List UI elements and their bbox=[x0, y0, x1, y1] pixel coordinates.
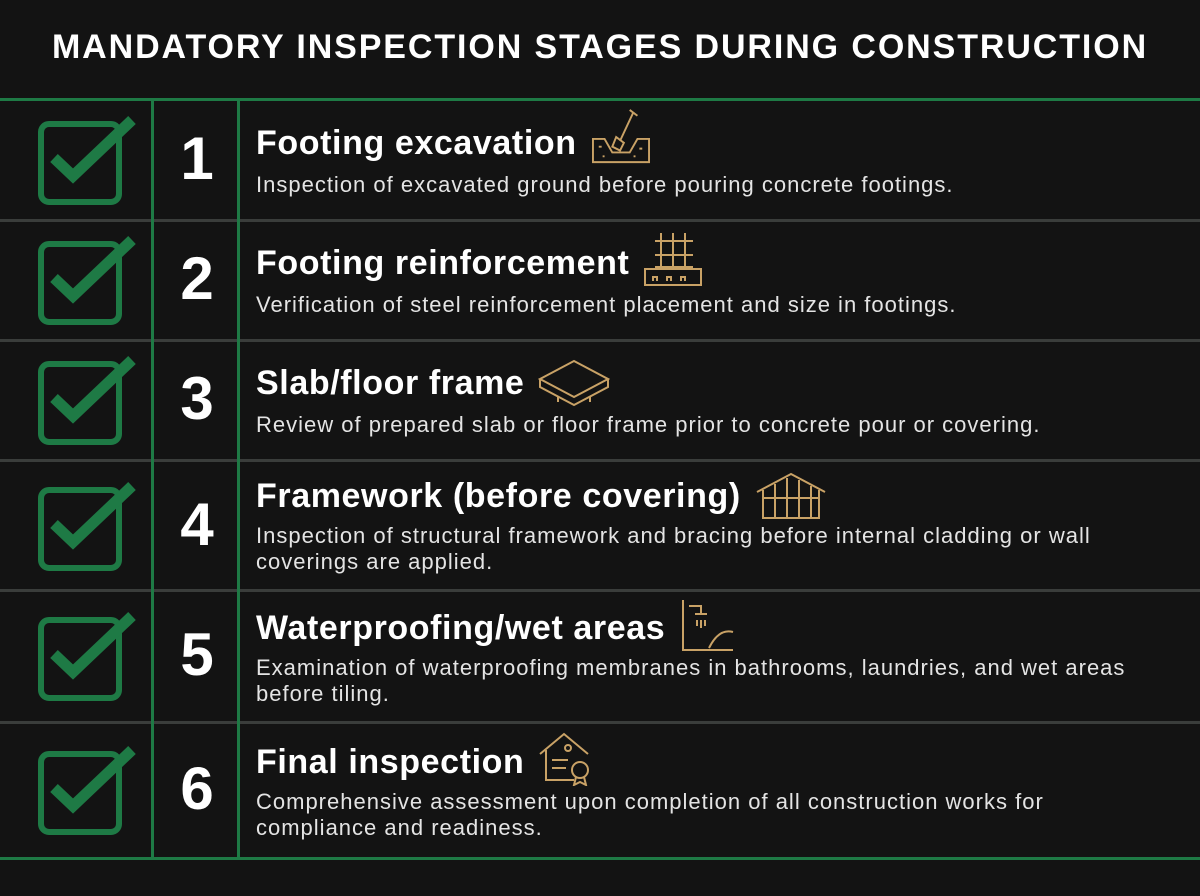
description 5: Examination of waterproofing membranes in bathrooms, laundries, and wet areas before tiling. bbox=[256, 655, 1125, 706]
row 4 bbox=[38, 472, 1091, 574]
heading 1 bbox=[256, 109, 650, 164]
heading 4 bbox=[256, 472, 826, 519]
checkbox 4 bbox=[38, 482, 136, 571]
number 6: 6 bbox=[180, 755, 214, 822]
description 6: Comprehensive assessment upon completion of all construction works for compliance and readiness. bbox=[256, 789, 1044, 840]
heading 5: Waterproofing/wet areas bbox=[256, 609, 665, 647]
row 3 bbox=[38, 356, 1040, 445]
heading 4: Framework (before covering) bbox=[256, 477, 741, 515]
row 6 bbox=[38, 732, 1044, 840]
checkbox 2 bbox=[38, 236, 136, 325]
heading 6 bbox=[256, 732, 589, 786]
icon: slab bbox=[538, 360, 610, 406]
checkbox 1 bbox=[38, 116, 136, 205]
heading 1: Footing excavation bbox=[256, 124, 577, 162]
number 4: 4 bbox=[180, 491, 214, 558]
heading 2 bbox=[256, 233, 702, 286]
heading 5 bbox=[256, 600, 734, 651]
description 1: Inspection of excavated ground before pouring concrete footings. bbox=[256, 172, 954, 197]
heading 2: Footing reinforcement bbox=[256, 244, 629, 282]
icon: house frame bbox=[756, 472, 826, 519]
checkbox 3 bbox=[38, 356, 136, 445]
description 3: Review of prepared slab or floor frame prior to concrete pour or covering. bbox=[256, 412, 1040, 437]
icon: rebar bbox=[644, 233, 702, 286]
title: MANDATORY INSPECTION STAGES DURING CONSTRUCTION bbox=[52, 28, 1148, 66]
icon: shower bbox=[682, 600, 734, 651]
icon: house certificate bbox=[539, 732, 589, 786]
number 2: 2 bbox=[180, 245, 214, 312]
checkbox 6 bbox=[38, 746, 136, 835]
description 2: Verification of steel reinforcement placement and size in footings. bbox=[256, 292, 956, 317]
description 4: Inspection of structural framework and bracing before internal cladding or wall coverings are applied. bbox=[256, 523, 1091, 574]
number 1: 1 bbox=[180, 125, 214, 192]
row 5 bbox=[38, 600, 1125, 706]
number 3: 3 bbox=[180, 365, 214, 432]
heading 6: Final inspection bbox=[256, 743, 524, 781]
row 2 bbox=[38, 233, 956, 325]
icon: shovel bbox=[592, 109, 650, 164]
heading 3: Slab/floor frame bbox=[256, 364, 524, 402]
checkbox 5 bbox=[38, 612, 136, 701]
number 5: 5 bbox=[180, 621, 214, 688]
row 1 bbox=[38, 109, 954, 205]
heading 3 bbox=[256, 360, 610, 406]
